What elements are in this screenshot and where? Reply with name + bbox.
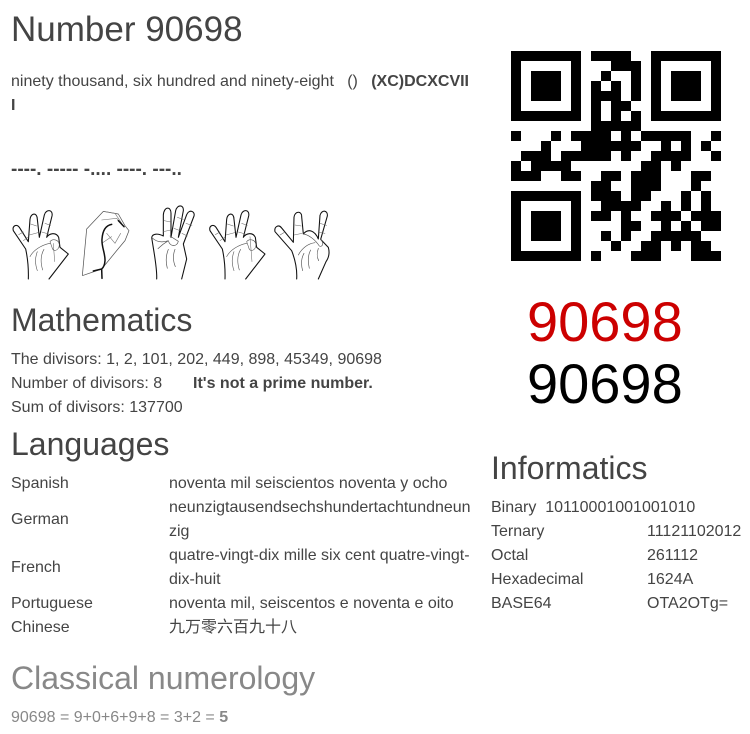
- base64: BASE64: [491, 595, 551, 612]
- octal: Octal: [491, 547, 528, 564]
- French value: [169, 547, 470, 588]
- number of divisors: Number of divisors: 8: [11, 375, 162, 392]
- heading: classical numerology: Classical numerology: [11, 660, 315, 696]
- Chinese value: 九万零六百九十八: [169, 619, 297, 636]
- hexadecimal: Hexadecimal: [491, 571, 583, 588]
- numerology sum: 90698 = 9+0+6+9+8 = 3+2 = 5: [11, 709, 228, 726]
- ternary: Ternary: [491, 523, 544, 540]
- French value: dix-huit: [169, 571, 221, 588]
- heading: informatics: Informatics: [491, 450, 647, 486]
- hand sign 6: [152, 206, 194, 279]
- French value: quatre-vingt-dix mille six cent quatre-vingt-: [169, 547, 470, 564]
- sum of divisors: Sum of divisors: 137700: [11, 399, 183, 416]
- German value: neunzigtausendsechshundertachtundneun: [169, 499, 471, 516]
- icon: sign language hands: [12, 205, 330, 280]
- French: French: [11, 559, 61, 576]
- divisors: The divisors: 1, 2, 101, 202, 449, 898, 45349, 90698: [11, 351, 382, 368]
- prime note: It's not a prime number.: [193, 375, 373, 392]
- hand sign 9: [210, 211, 265, 279]
- large red number: 90698: [527, 290, 683, 353]
- octal value: 261112: [647, 547, 698, 564]
- base64 value: OTA2OTg=: [647, 595, 728, 612]
- German value: zig: [169, 523, 189, 540]
- number in words and roman numeral: ninety thousand, six hundred and ninety-eight () (XC)DCXCVII: [11, 73, 469, 90]
- hand sign 9: [13, 211, 68, 279]
- title: Number 90698: [11, 10, 243, 49]
- hand sign 0: [82, 211, 129, 278]
- binary: Binary 10110001001001010: [491, 499, 695, 516]
- German value: [169, 499, 471, 540]
- number in words and roman numeral: [11, 73, 469, 114]
- Spanish: Spanish: [11, 475, 69, 492]
- German: German: [11, 511, 69, 528]
- Spanish value: noventa mil seiscientos noventa y ocho: [169, 475, 447, 492]
- large black number: 90698: [527, 352, 683, 415]
- hand sign 8: [275, 211, 329, 279]
- morse code: ----. ----- -.... ----. ---..: [11, 159, 182, 180]
- number in words and roman numeral: I: [11, 97, 15, 114]
- Portuguese value: noventa mil, seiscentos e noventa e oito: [169, 595, 454, 612]
- ternary value: 11121102012: [647, 523, 741, 540]
- Chinese: Chinese: [11, 619, 70, 636]
- heading: mathematics: Mathematics: [11, 302, 192, 338]
- Portuguese: Portuguese: [11, 595, 93, 612]
- hexadecimal value: 1624A: [647, 571, 693, 588]
- QR code: [511, 51, 721, 261]
- heading: languages: Languages: [11, 426, 169, 462]
